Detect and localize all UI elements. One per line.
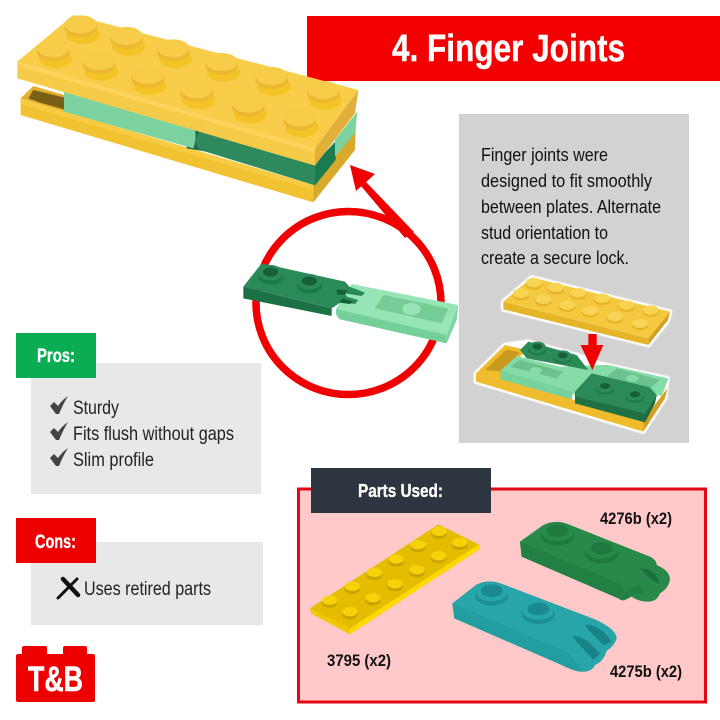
part label: 3795: 3795 (x2): [327, 651, 391, 670]
icon: check marks: [50, 396, 68, 466]
cons heading: Cons:: [35, 532, 76, 553]
explanation text: Finger joints were: [481, 144, 608, 165]
part label: 4276b: 4276b (x2): [600, 509, 672, 528]
parts heading: Parts Used:: [358, 481, 443, 501]
panel: pros: [16, 333, 261, 494]
explanation text: create a secure lock.: [481, 247, 629, 268]
pros list: [73, 398, 234, 471]
pros heading: Pros:: [37, 346, 75, 367]
explanation text: stud orientation to: [481, 222, 608, 243]
illustration: joined finger hinge plates: [243, 263, 458, 343]
panel: parts used: [298, 468, 706, 702]
explanation text: between plates. Alternate: [481, 196, 661, 217]
explanation text: designed to fit smoothly: [481, 170, 653, 191]
panel: cons: [16, 518, 263, 625]
logo: T&B brick: T&B: [28, 660, 83, 699]
part: yellow plate 3795: [310, 524, 480, 634]
pros heading: [16, 333, 96, 378]
part: green hinge 4276b: [520, 522, 670, 602]
title banner: 4. Finger Joints: [392, 28, 625, 70]
parts heading: [311, 468, 491, 513]
red circle highlight: [256, 212, 441, 394]
cons heading: [16, 518, 96, 563]
title banner: [307, 16, 720, 81]
icon: cross: [58, 579, 78, 598]
arrow: down: [581, 334, 603, 370]
pros list: Fits flush without gaps: [73, 424, 234, 445]
illustration: exploded assembly: [476, 277, 670, 432]
top plate: [503, 277, 670, 345]
arrow pointing from circle to brick: [350, 165, 414, 238]
part label: 4275b: 4275b (x2): [610, 662, 682, 681]
pros list: Sturdy: [73, 398, 119, 419]
logo: T&B brick: [16, 646, 95, 702]
lower assembly: [476, 342, 668, 432]
part: teal hinge 4275b: [452, 581, 617, 672]
explanation text: [481, 144, 661, 268]
cons list: Uses retired parts: [84, 579, 211, 600]
panel: explanation: [459, 114, 689, 443]
illustration: assembled finger joint brick: [17, 15, 358, 202]
pros list: Slim profile: [73, 450, 154, 471]
